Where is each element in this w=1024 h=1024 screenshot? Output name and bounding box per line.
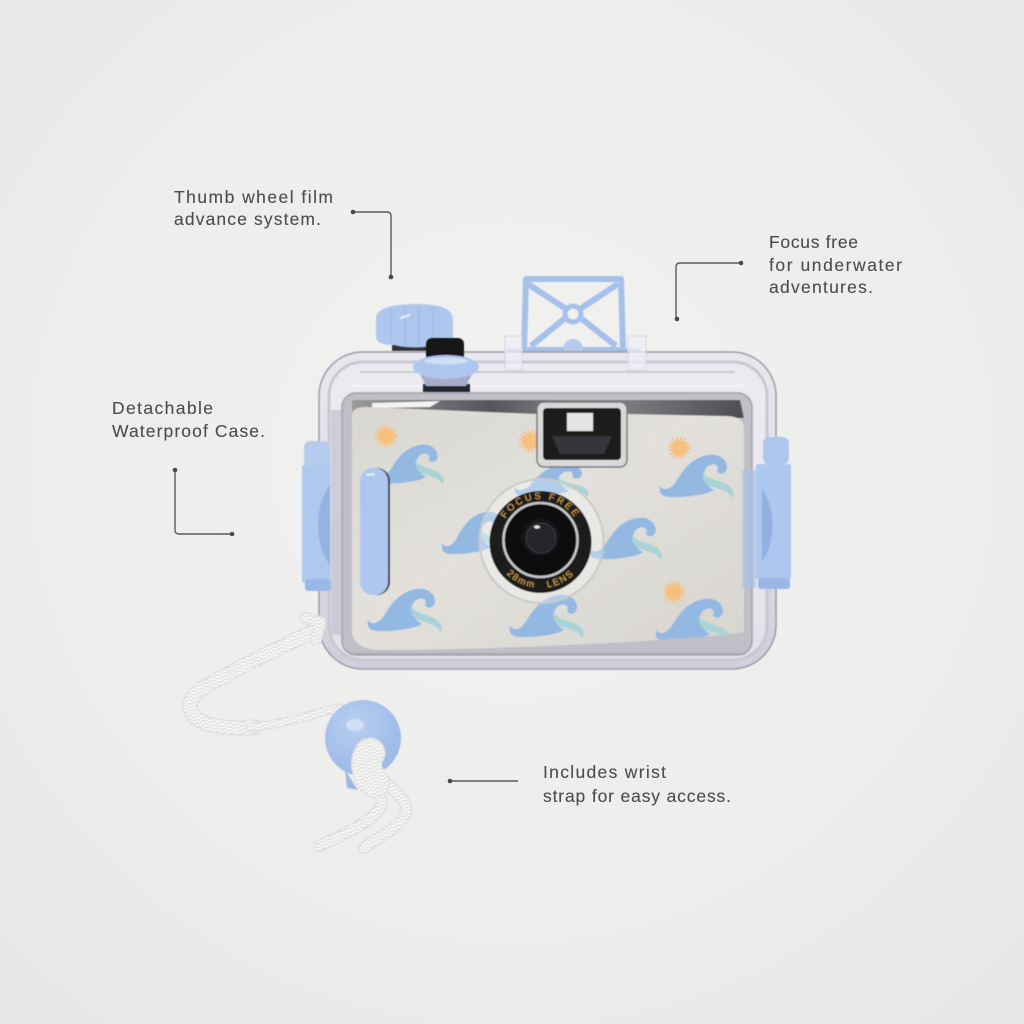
wrist strap [190,618,406,848]
callout: waterproof case: Waterproof Case. [112,421,265,441]
icon: viewfinder frame [507,279,640,359]
callout: focus free: for underwater [769,255,902,275]
shutter slider [360,468,390,595]
strap bead [325,700,401,776]
case bottom band [350,653,745,655]
callout: wrist strap: Includes wrist [543,762,666,782]
case outer shell [319,352,776,669]
callout: thumb wheel: Thumb wheel film [174,187,333,207]
callout: waterproof case [112,398,265,536]
camera top dark strip [352,400,744,418]
callout: wrist strap [448,762,731,806]
left hinge [302,441,331,591]
callout: waterproof case: Detachable [112,398,213,418]
callout: focus free: Focus free [769,232,858,252]
viewfinder [537,402,627,467]
case clips [505,336,646,370]
case inner window [342,393,752,655]
callout: wrist strap: strap for easy access. [543,786,731,806]
body print [368,426,734,642]
callout: focus free: adventures. [769,277,873,297]
right hinge [756,437,791,589]
blue hinge tint [742,470,756,588]
icon: shutter button [413,338,479,392]
strap strands [320,790,382,846]
callout: thumb wheel [174,187,393,279]
lens [478,478,605,604]
camera body [352,407,744,650]
callout: thumb wheel: advance system. [174,209,321,229]
camera case [302,335,792,670]
case top rim [360,371,735,373]
left case band [331,410,342,635]
lens: FOCUS FREE [500,492,580,519]
callout: focus free [675,232,902,321]
icon: thumb wheel [376,304,453,351]
lens: 28mm LENS [506,569,574,588]
